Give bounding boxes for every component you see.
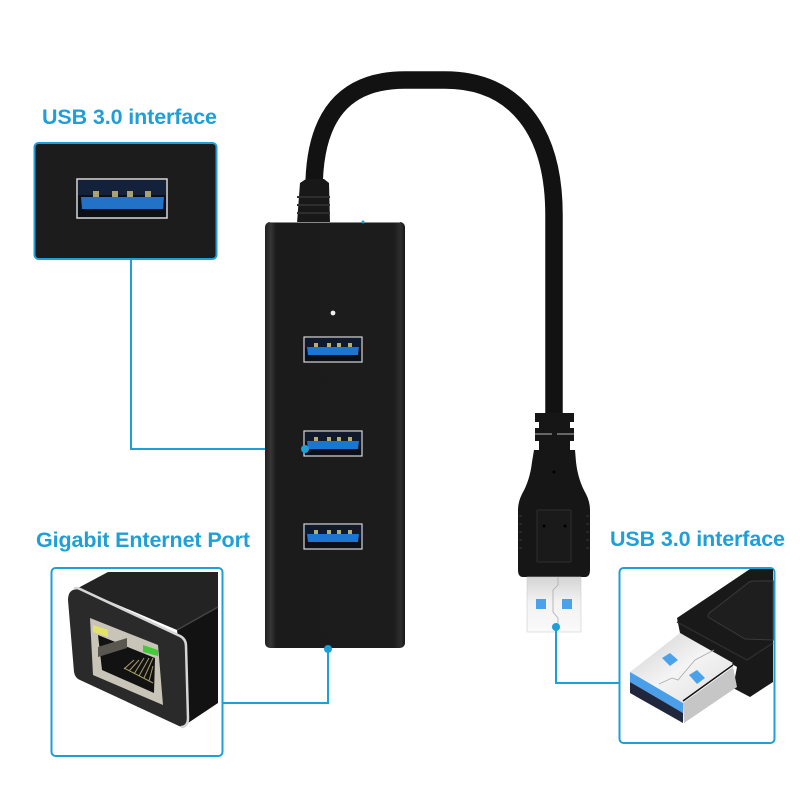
connector: USB plug callout	[552, 623, 620, 683]
connector dot: USB port	[301, 445, 309, 453]
panel: USB plug close-up	[620, 568, 774, 743]
heading: Gigabit Enternet Port: Gigabit Enternet Port	[36, 528, 250, 552]
connector line: USB port callout	[131, 260, 305, 449]
heading: USB 3.0 interface (right): USB 3.0 interface	[610, 527, 785, 551]
USB plug	[518, 413, 590, 632]
connector: ethernet callout	[223, 645, 332, 703]
hub strain relief	[297, 179, 330, 223]
ethernet LED yellow	[93, 625, 108, 637]
USB port 2	[304, 431, 362, 456]
ethernet contacts	[124, 658, 153, 683]
indicator LED	[331, 311, 335, 315]
cable	[314, 80, 554, 420]
hub body	[265, 220, 405, 648]
plug metal	[527, 577, 581, 632]
heading: USB 3.0 interface (top left): USB 3.0 interface	[42, 105, 217, 129]
USB port 3	[304, 524, 362, 549]
USB port 1	[304, 337, 362, 362]
panel: USB 3.0 port close-up	[34, 143, 216, 259]
panel: ethernet port close-up	[52, 568, 222, 756]
ethernet LED green	[143, 645, 158, 656]
